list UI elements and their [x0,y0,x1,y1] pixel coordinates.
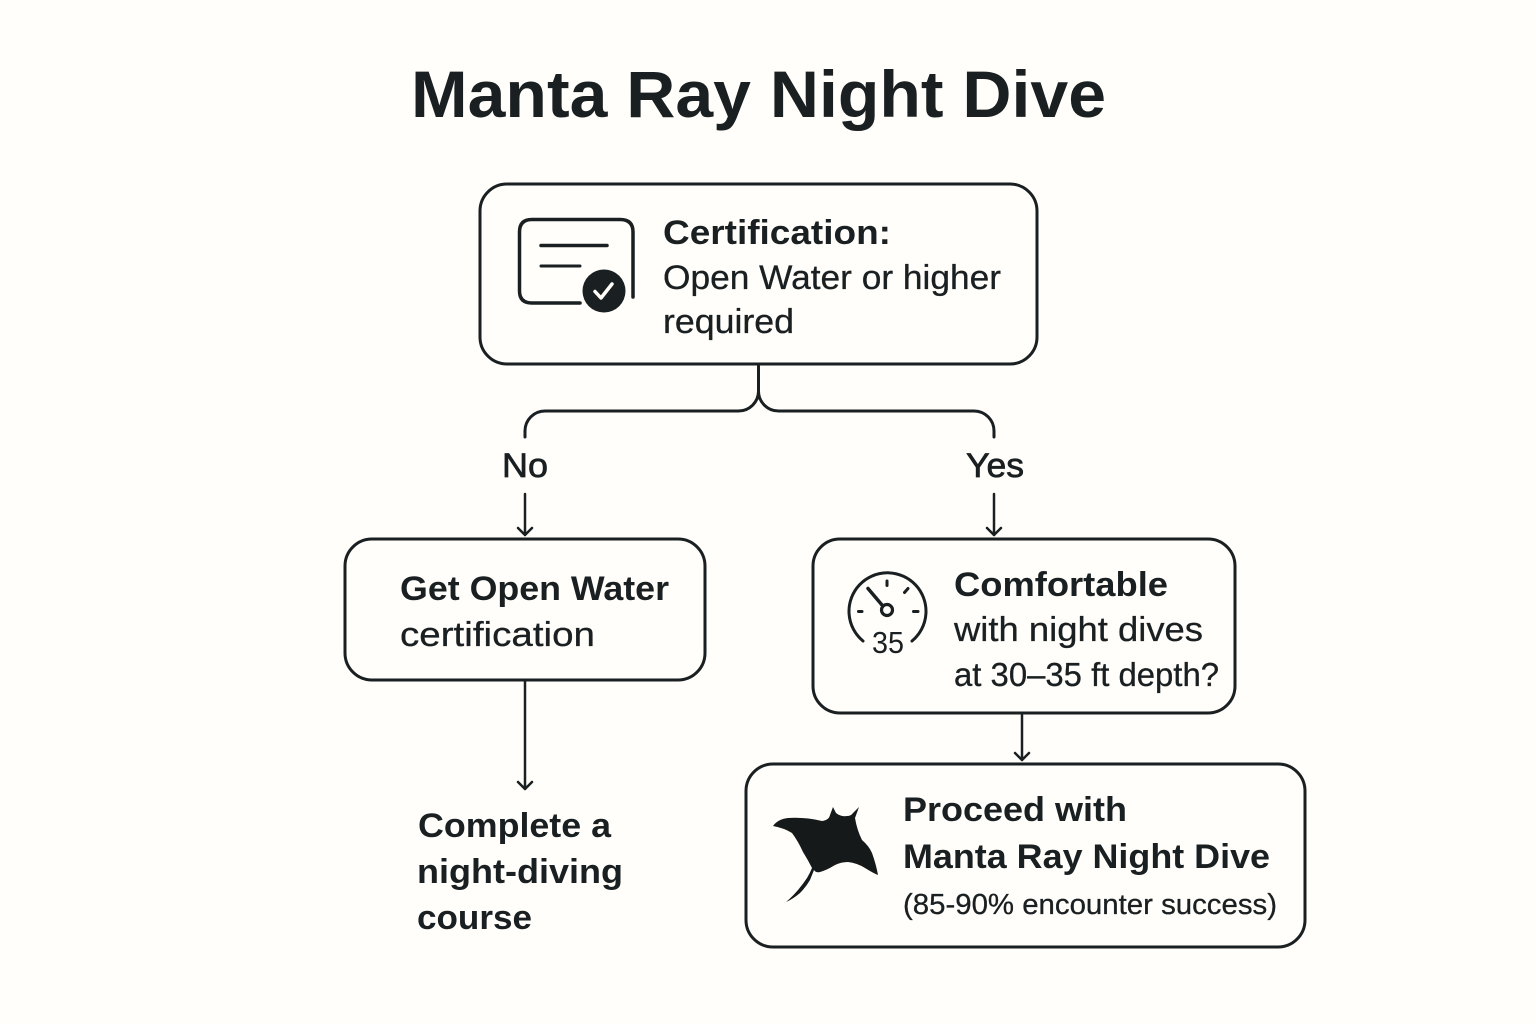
branch connector [525,366,994,437]
text: certification: required [663,303,794,341]
text: certification: Certification: [663,214,891,252]
arrow: No to open water [518,494,532,535]
text: comfortable: Comfortable [954,566,1168,604]
text: proceed [903,791,1277,921]
arrow: comfortable to proceed [1015,715,1029,760]
text: get open water: certification [400,616,595,654]
text: complete a night-diving course [417,807,623,937]
icon: manta ray [773,807,878,902]
arrow: open water to course [518,681,532,789]
panel: get open water [345,539,705,680]
arrow: Yes to comfortable [987,494,1001,535]
text: proceed: Manta Ray Night Dive [903,838,1270,876]
panel: proceed [746,764,1305,947]
text: comfortable [953,566,1219,693]
text: certification: Open Water or higher [663,259,1001,297]
label: No: No [502,447,548,485]
icon: depth gauge [849,573,926,660]
text: get open water: Get Open Water [400,570,669,608]
panel: comfortable [813,539,1235,713]
text: proceed: (85-90% encounter success) [903,889,1277,921]
text: certification [663,214,1001,341]
text: get open water [400,570,669,654]
text: complete a night-diving course: night-diving [417,853,623,891]
text: complete a night-diving course: Complete a [418,807,612,845]
label: Yes: Yes [966,447,1024,485]
text: comfortable: with night dives [953,611,1203,649]
icon: depth gauge: 35 [872,625,904,660]
text: complete a night-diving course: course [417,899,532,937]
title: Manta Ray Night Dive [411,57,1106,131]
icon: certificate with check [520,220,633,312]
panel: certification [480,184,1037,364]
text: proceed: Proceed with [903,791,1127,829]
text: comfortable: at 30–35 ft depth? [954,656,1219,693]
